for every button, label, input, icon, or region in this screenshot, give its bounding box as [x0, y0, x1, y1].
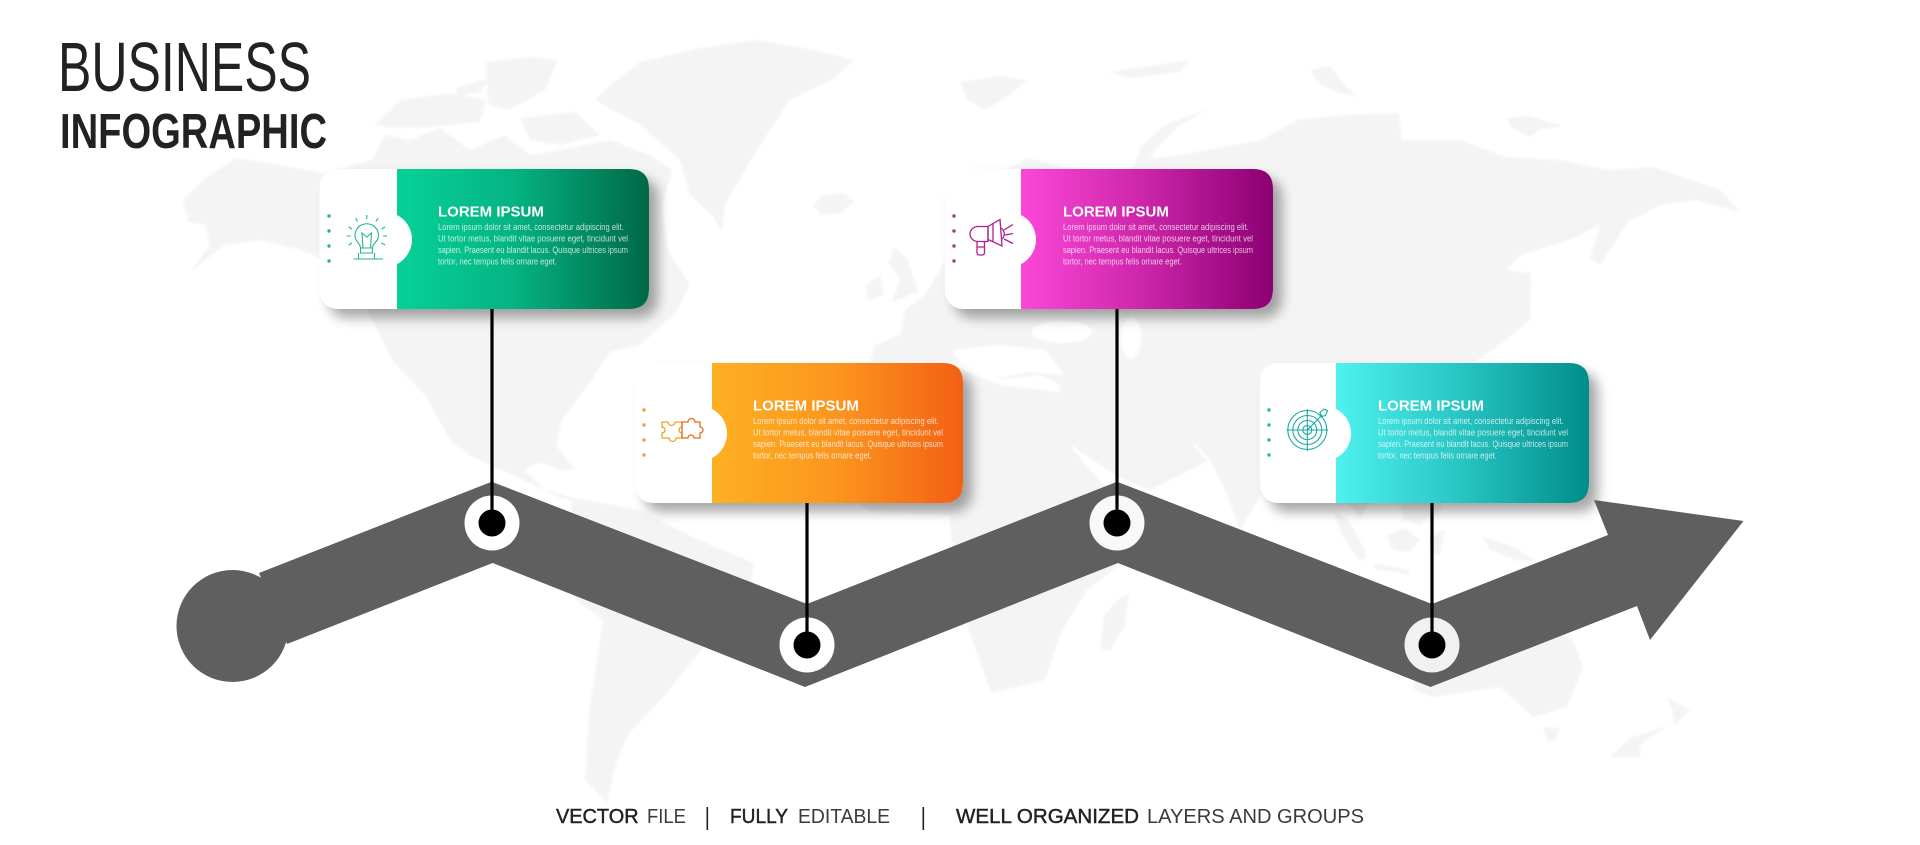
timeline node 4 with connector — [1404, 503, 1460, 672]
text: cyan card copy: Lorem ipsum dolor sit amet, consectetur adipiscing elit. — [1378, 416, 1564, 426]
arrow: zigzag timeline — [176, 482, 1744, 687]
icon: light bulb — [346, 215, 387, 259]
text: green card copy: LOREM IPSUM — [438, 204, 544, 221]
text: magenta card copy: sapien. Praesent eu blandit lacus. Quisque ultrices ipsum — [1063, 245, 1253, 255]
footer tagline: LAYERS AND GROUPS — [1147, 805, 1364, 828]
panel: magenta card with megaphone — [945, 169, 1282, 318]
timeline node 3 with connector — [1090, 309, 1144, 550]
text: cyan card copy: tortor, nec tempus felis ornare eget. — [1378, 450, 1497, 460]
text: green card copy — [438, 204, 628, 266]
footer tagline — [556, 805, 1364, 830]
text: orange card copy: sapien. Praesent eu blandit lacus. Quisque ultrices ipsum — [753, 439, 943, 449]
text: green card copy: Lorem ipsum dolor sit amet, consectetur adipiscing elit. — [438, 222, 624, 232]
text: green card copy: Ut tortor metus, blandit vitae posuere eget, tincidunt vel — [438, 233, 628, 243]
text: green card copy: tortor, nec tempus felis ornare eget. — [438, 256, 557, 266]
text: orange card copy: LOREM IPSUM — [753, 398, 859, 415]
footer tagline: FILE — [647, 805, 686, 828]
panel: cyan card with target — [1260, 363, 1598, 512]
footer tagline: WELL ORGANIZED — [956, 805, 1139, 828]
text: magenta card copy: Ut tortor metus, blandit vitae posuere eget, tincidunt vel — [1063, 233, 1253, 243]
text: cyan card copy: Ut tortor metus, blandit vitae posuere eget, tincidunt vel — [1378, 427, 1568, 437]
text: magenta card copy: LOREM IPSUM — [1063, 204, 1169, 221]
text: orange card copy: Ut tortor metus, blandit vitae posuere eget, tincidunt vel — [753, 427, 943, 437]
footer tagline: EDITABLE — [798, 805, 890, 828]
world map background — [183, 40, 1741, 803]
text: orange card copy: tortor, nec tempus felis ornare eget. — [753, 450, 872, 460]
heading: business infographic — [58, 28, 327, 159]
icon: puzzle pieces — [662, 418, 703, 442]
footer tagline: FULLY — [730, 805, 788, 828]
text: magenta card copy — [1063, 204, 1253, 266]
heading: business infographic: INFOGRAPHIC — [60, 105, 327, 159]
timeline node 2 with connector — [780, 503, 834, 672]
text: magenta card copy: tortor, nec tempus felis ornare eget. — [1063, 256, 1182, 266]
icon: megaphone — [970, 220, 1013, 255]
timeline node 1 with connector — [464, 309, 520, 550]
text: green card copy: sapien. Praesent eu blandit lacus. Quisque ultrices ipsum — [438, 245, 628, 255]
text: orange card copy: Lorem ipsum dolor sit amet, consectetur adipiscing elit. — [753, 416, 939, 426]
icon: target with arrow — [1286, 409, 1328, 451]
text: orange card copy — [753, 398, 943, 460]
heading: business infographic: BUSINESS — [58, 28, 311, 106]
panel: green card with light bulb — [320, 169, 658, 318]
footer tagline: VECTOR — [556, 805, 639, 828]
text: cyan card copy: LOREM IPSUM — [1378, 398, 1484, 415]
panel: orange card with puzzle — [635, 363, 972, 512]
text: magenta card copy: Lorem ipsum dolor sit amet, consectetur adipiscing elit. — [1063, 222, 1249, 232]
text: cyan card copy: sapien. Praesent eu blandit lacus. Quisque ultrices ipsum — [1378, 439, 1568, 449]
text: cyan card copy — [1378, 398, 1568, 460]
